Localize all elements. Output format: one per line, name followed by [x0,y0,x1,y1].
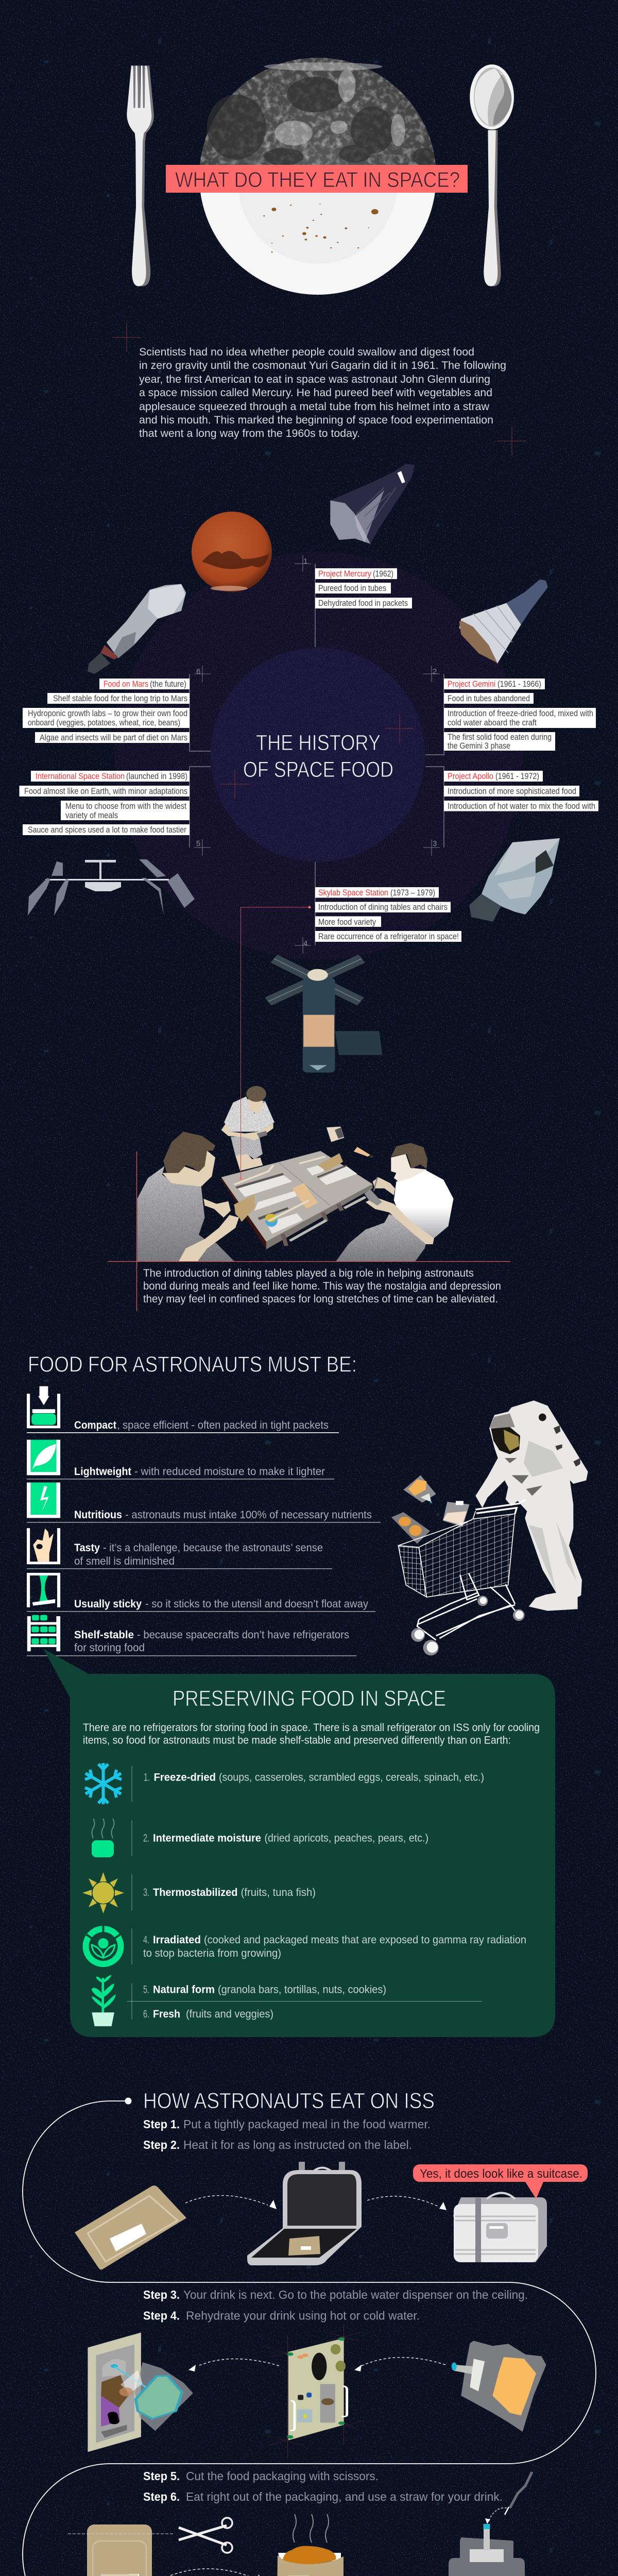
label: Gemini: the Gemini 3 phase [448,741,510,751]
item: nutritious: Nutritious [74,1509,122,1521]
item 3: Thermostabilized [153,1887,238,1899]
step cross markers [194,555,440,954]
heading: the history of space food [243,731,393,782]
illustration: pouch at dispenser [88,2332,193,2452]
item 6 [143,2008,273,2020]
label: ISS: (launched in 1998) [126,771,187,781]
text: steps 3 and 4 [143,2288,528,2323]
illustration: drink pouch [452,2341,546,2432]
illustration: opened food pouch with steam [277,2514,344,2576]
icon: lightweight [27,1440,60,1475]
text: steps 3 and 4: Rehydrate your drink using hot or cold water. [186,2309,420,2323]
icon: scissors [179,2518,232,2553]
label: Food on Mars: Shelf stable food for the long trip to Mars [53,693,187,703]
item: tasty [27,1542,332,1569]
label: Skylab: 4 [303,939,307,948]
icon: radura irradiation symbol [82,1926,124,1967]
arrow: warmer to closed case [367,2196,447,2210]
plate half [200,193,435,295]
label: Food on Mars: (the future) [150,679,186,689]
icon: Orion capsule [88,584,186,674]
label: Gemini: Introduction of freeze-dried food, mixed with [448,708,593,718]
dining table caption [143,1267,501,1305]
label: Skylab [303,887,461,948]
item: lightweight: - with reduced moisture to make it lighter [134,1466,325,1478]
icon: moon on a plate [199,58,436,295]
label: Apollo: Project Apollo [448,771,493,781]
text: steps 5 and 6: Step 6. [143,2490,180,2503]
dining table caption: bond during meals and feel like home. This way the nostalgia and depression [143,1280,501,1292]
text: steps 5 and 6: Eat right out of the packaging, and use a straw for your drink. [186,2490,503,2503]
item: sticky [27,1598,375,1612]
item: shelf-stable: Shelf-stable [74,1629,134,1641]
intro text: a space mission called Mercury. He had pureed beef with vegetables and [139,387,492,399]
item 5: (granola bars, tortillas, nuts, cookies) [218,1984,386,1996]
arrows: between step 4 images [188,2358,445,2371]
illustration: drink pouch with straw [449,2472,532,2576]
intro text: Scientists had no idea whether people could swallow and digest food [139,346,474,358]
icon: Skylab station [268,959,382,1073]
left astronaut [138,1132,255,1261]
shopping cart [398,1500,525,1655]
item 6: (fruits and veggies) [186,2008,273,2020]
label: ISS: variety of meals [65,810,118,820]
item: shelf-stable: for storing food [74,1642,145,1654]
history inner circle [211,648,425,862]
heading: preserving food: PRESERVING FOOD IN SPACE [173,1686,446,1711]
heading: the history of space food: OF SPACE FOOD [243,757,393,782]
intro text: applesauce squeezed through a metal tube from his helmet into a straw [139,401,490,413]
item 4: (cooked and packaged meats that are exposed to gamma ray radiation [204,1934,526,1946]
item 1: (soups, casseroles, scrambled eggs, cereals, spinach, etc.) [219,1771,484,1784]
item 4: 4. [143,1934,149,1946]
intro text: that went a long way from the 1960s to today. [139,428,360,439]
item 3: (fruits, tuna fish) [241,1887,316,1899]
item: tasty: of smell is diminished [74,1555,175,1567]
callout: suitcase joke [413,2164,588,2199]
icon: potted plant [92,1975,116,2026]
label: Apollo [433,771,598,848]
illustration: closed food warmer [453,2193,547,2262]
item: nutritious [27,1509,381,1523]
label: ISS: Menu to choose from with the widest [65,801,186,811]
label: Mercury: Project Mercury [318,569,371,579]
item 5 [143,1984,386,1996]
item 3 [143,1887,316,1899]
item: lightweight [27,1466,334,1480]
astronaut suit [475,1400,588,1611]
item 6: 6. [143,2008,149,2020]
item 5: Natural form [153,1984,215,1996]
heading: the history of space food: THE HISTORY [256,731,381,755]
item: tasty: Tasty [74,1542,100,1554]
item 5: 5. [143,1984,149,1996]
item: lightweight: Lightweight [74,1466,131,1478]
text: steps 3 and 4: Your drink is next. Go to the potable water dispenser on the ceiling. [183,2288,528,2301]
label: Mercury: Pureed food in tubes [318,583,386,593]
item: compact: Compact [74,1419,116,1431]
text: steps 1 and 2: Put a tightly packaged meal in the food warmer. [183,2117,431,2131]
label: Gemini: Food in tubes abandoned [448,693,530,703]
icon: shelf-stable [27,1615,60,1651]
label: Apollo: Introduction of more sophisticated food [448,786,576,796]
dining table caption: The introduction of dining tables played a big role in helping astronauts [143,1267,474,1279]
item 1: 1. [144,1771,150,1784]
label: Food on Mars: 6 [196,667,200,676]
label: Skylab: Rare occurrence of a refrigerator in space! [318,931,459,941]
item: tasty: - it’s a challenge, because the astronauts’ sense [103,1542,323,1554]
heading: how astronauts eat on ISS: HOW ASTRONAUTS EAT ON ISS [143,2089,435,2113]
item: sticky: - so it sticks to the utensil and doesn’t float away [145,1598,368,1610]
item 4: Irradiated [153,1934,201,1946]
label: Apollo: 3 [433,839,437,848]
text: steps 1 and 2 [143,2117,431,2151]
text: steps 1 and 2: Step 1. [143,2117,180,2131]
intro text [139,346,506,439]
label: Gemini: 2 [433,667,437,676]
label: Mercury: Dehydrated food in packets [318,598,408,608]
text: steps 5 and 6: Step 5. [143,2469,180,2483]
item 6: Fresh [153,2008,180,2020]
panel: preserving food in space [43,1649,555,2037]
icon: Mercury capsule [330,464,415,544]
item: nutritious: - astronauts must intake 100% of necessary nutrients [125,1509,372,1521]
standing astronaut [221,1086,274,1171]
label: Skylab: Skylab Space Station [318,888,388,897]
food packets [391,1475,470,1544]
intro text: year, the first American to eat in space was astronaut John Glenn during [139,374,490,385]
heading: food for astronauts must be: FOOD FOR ASTRONAUTS MUST BE: [28,1352,357,1377]
label: Food on Mars [23,667,200,743]
history outer circle [114,552,522,960]
item: shelf-stable: - because spacecrafts don’t have refrigerators [137,1629,349,1641]
item 2: 2. [143,1832,149,1844]
right astronaut [336,1143,454,1261]
text: steps 3 and 4: Step 4. [143,2309,180,2323]
label: ISS: International Space Station [36,771,125,781]
illustration: astronauts at dining table [138,1086,454,1261]
intro text: in zero gravity until the cosmonaut Yuri Gagarin did it in 1961. The following [139,360,506,371]
item 2: (dried apricots, peaches, pears, etc.) [265,1832,428,1844]
table [221,1151,372,1249]
text: steps 5 and 6: Cut the food packaging with scissors. [186,2469,379,2483]
list: food requirements [27,1386,381,1656]
label: Gemini: The first solid food eaten during [448,732,552,742]
icon: tasty [27,1528,60,1564]
label: Gemini: cold water aboard the craft [448,718,537,727]
icon: snowflake [85,1763,122,1804]
label: Gemini: (1961 - 1966) [497,679,541,689]
icon: nutritious [27,1482,60,1518]
label: Apollo: Introduction of hot water to mix the food with [448,801,595,811]
icon: sticky [27,1573,60,1607]
label: Food on Mars: Food on Mars [104,679,148,689]
label: ISS: Food almost like on Earth, with minor adaptations [24,786,187,796]
item: sticky: Usually sticky [74,1598,142,1610]
label: Gemini: Project Gemini [448,679,495,689]
illustration: sealed food pouch [68,2524,174,2576]
intro text [83,1722,540,1747]
item: compact [27,1419,339,1433]
label: Mercury: 1 [303,557,307,566]
text: steps 1 and 2: Heat it for as long as instructed on the label. [183,2138,412,2151]
item: shelf-stable [27,1629,356,1656]
dining table caption: they may feel in confined spaces for long stretches of time can be alleviated. [143,1293,498,1305]
item 4: to stop bacteria from growing) [143,1947,281,1959]
intro text: and his mouth. This marked the beginning of space food experimentation [139,414,493,426]
icon: Gemini capsule [459,579,548,664]
icon: spoon [470,64,514,286]
icon: steam and moist food [92,1819,114,1857]
item 2: Intermediate moisture [153,1832,261,1844]
item 3: 3. [143,1887,149,1899]
text: steps 3 and 4: Step 3. [143,2288,180,2301]
label: Skylab: (1973 – 1979) [390,888,435,897]
icon: fork [127,65,154,286]
icon: ISS [28,859,195,916]
illustration: open food warmer [247,2162,362,2265]
label: Apollo: (1961 - 1972) [495,771,539,781]
item 4 [143,1934,526,1959]
timeline connector lines [190,564,444,945]
winding path line [23,2098,596,2576]
title banner: WHAT DO THEY EAT IN SPACE? [175,167,460,192]
callout: suitcase joke: Yes, it does look like a suitcase. [420,2167,582,2181]
label: ISS [20,771,200,848]
red connector from Skylab to dining scene [239,906,311,1180]
item: compact: , space efficient - often packed in tight packets [117,1419,329,1431]
arrow: pouch to open pouch [170,2569,262,2576]
decorative crosses [112,323,526,455]
illustration: meal packet [75,2185,186,2269]
label: Gemini [433,667,596,751]
item 1: Freeze-dried [153,1771,216,1784]
floating food packets [327,1127,373,1158]
icon: sun [82,1872,124,1913]
arrow: packet to warmer [185,2195,277,2209]
label: Skylab: Introduction of dining tables and chairs [318,902,448,912]
label: Mercury: (1962) [373,569,393,579]
illustration: water dispenser panel [263,2324,363,2459]
moon half [200,58,436,165]
item 2 [143,1832,428,1844]
intro text: There are no refrigerators for storing food in space. There is a small refrigerator on ISS only for cooling [83,1722,540,1734]
label: Food on Mars: onboard (veggies, potatoes, wheat, rice, beans) [28,718,180,727]
text: steps 5 and 6 [143,2469,503,2503]
label: ISS: Sauce and spices used a lot to make food tastier [28,825,186,835]
label: Skylab: More food variety [318,917,376,927]
text: steps 1 and 2: Step 2. [143,2138,180,2151]
intro text: items, so food for astronauts must be made shelf-stable and preserved differently than on Earth: [83,1734,511,1747]
icon: Apollo capsule [469,838,560,922]
icon: compact [27,1386,60,1428]
label: ISS: 5 [196,839,200,848]
illustration: astronaut pushing a shopping cart [391,1400,588,1655]
label: Mercury [303,557,412,608]
icon: Mars [192,512,272,592]
label: Food on Mars: Hydroponic growth labs – to grow their own food [28,708,187,718]
label: Food on Mars: Algae and insects will be part of diet on Mars [40,733,187,742]
